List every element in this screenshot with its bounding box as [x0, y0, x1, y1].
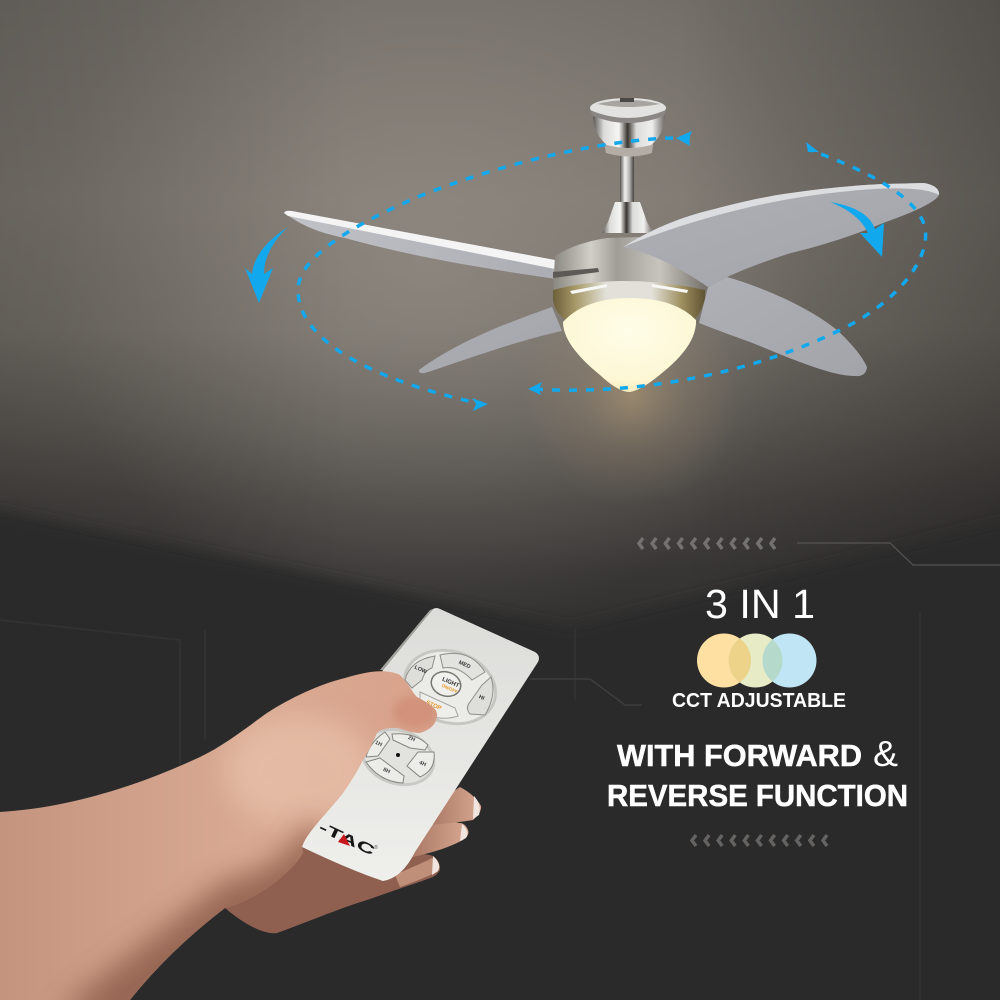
fan motor housing	[553, 237, 705, 300]
hand: palm and thumb	[0, 660, 450, 1000]
remote: low label: LOW	[413, 665, 428, 676]
fan blade: upper right	[623, 183, 939, 287]
ceiling fan	[284, 98, 939, 392]
remote: registered mark: ®	[374, 844, 378, 851]
remote: 8H label: 8H	[382, 767, 391, 775]
fan motor collar	[602, 202, 653, 233]
arrowhead: upper right	[806, 142, 819, 152]
hand: thumb tip tint	[393, 696, 437, 728]
fan blade: left	[284, 211, 600, 279]
remote: hi label: HI	[478, 694, 486, 702]
fan lamp glass	[563, 298, 696, 392]
remote: timer button cluster	[353, 719, 443, 795]
large arrow: right	[830, 202, 884, 257]
fan blade: lower right	[699, 277, 867, 376]
remote: med label: MED	[458, 660, 471, 670]
divider: top chevrons	[639, 538, 775, 549]
hand: fingers behind remote	[225, 787, 481, 933]
icon: three overlapping colour temperature circles	[697, 634, 816, 688]
fan ring slots	[570, 284, 688, 294]
hand: lower shadow	[60, 815, 330, 1000]
text: with forward: WITH FORWARD	[617, 738, 862, 773]
large arrow: left	[245, 227, 288, 303]
remote: logo red triangle	[338, 834, 350, 846]
arrowhead: bottom left	[528, 382, 542, 395]
dashed rotation path: bottom and right	[535, 150, 926, 390]
remote: 1H label: 1H	[374, 740, 383, 748]
fan ceiling canopy	[590, 98, 666, 156]
arrowhead: bottom	[472, 398, 488, 411]
remote: brand logo: -TAC	[317, 819, 378, 858]
remote: 2H label: 2H	[407, 735, 416, 743]
remote: light label: LIGHT	[441, 677, 460, 690]
dashed rotation path: left and top	[298, 138, 690, 404]
remote: 4H label: 4H	[418, 760, 427, 768]
text: ampersand: &	[873, 733, 898, 774]
remote control	[302, 608, 539, 881]
remote: on off label: ON/OFF	[441, 683, 459, 694]
fan stem	[620, 148, 634, 203]
divider: bottom chevrons	[692, 835, 827, 846]
remote: upper button cluster	[393, 637, 507, 737]
hand holding remote	[0, 608, 539, 1000]
text: reverse function: REVERSE FUNCTION	[607, 778, 908, 813]
label: CCT adjustable: CCT ADJUSTABLE	[672, 690, 846, 712]
remote: stop label: STOP	[425, 700, 442, 712]
heading: 3 in 1: 3 IN 1	[705, 581, 815, 627]
fan blade: lower left	[419, 307, 562, 373]
hand: palm highlight	[225, 715, 375, 825]
arrowhead: top	[676, 131, 692, 146]
rotation arrows	[245, 131, 926, 411]
fan brass ring	[553, 281, 705, 322]
